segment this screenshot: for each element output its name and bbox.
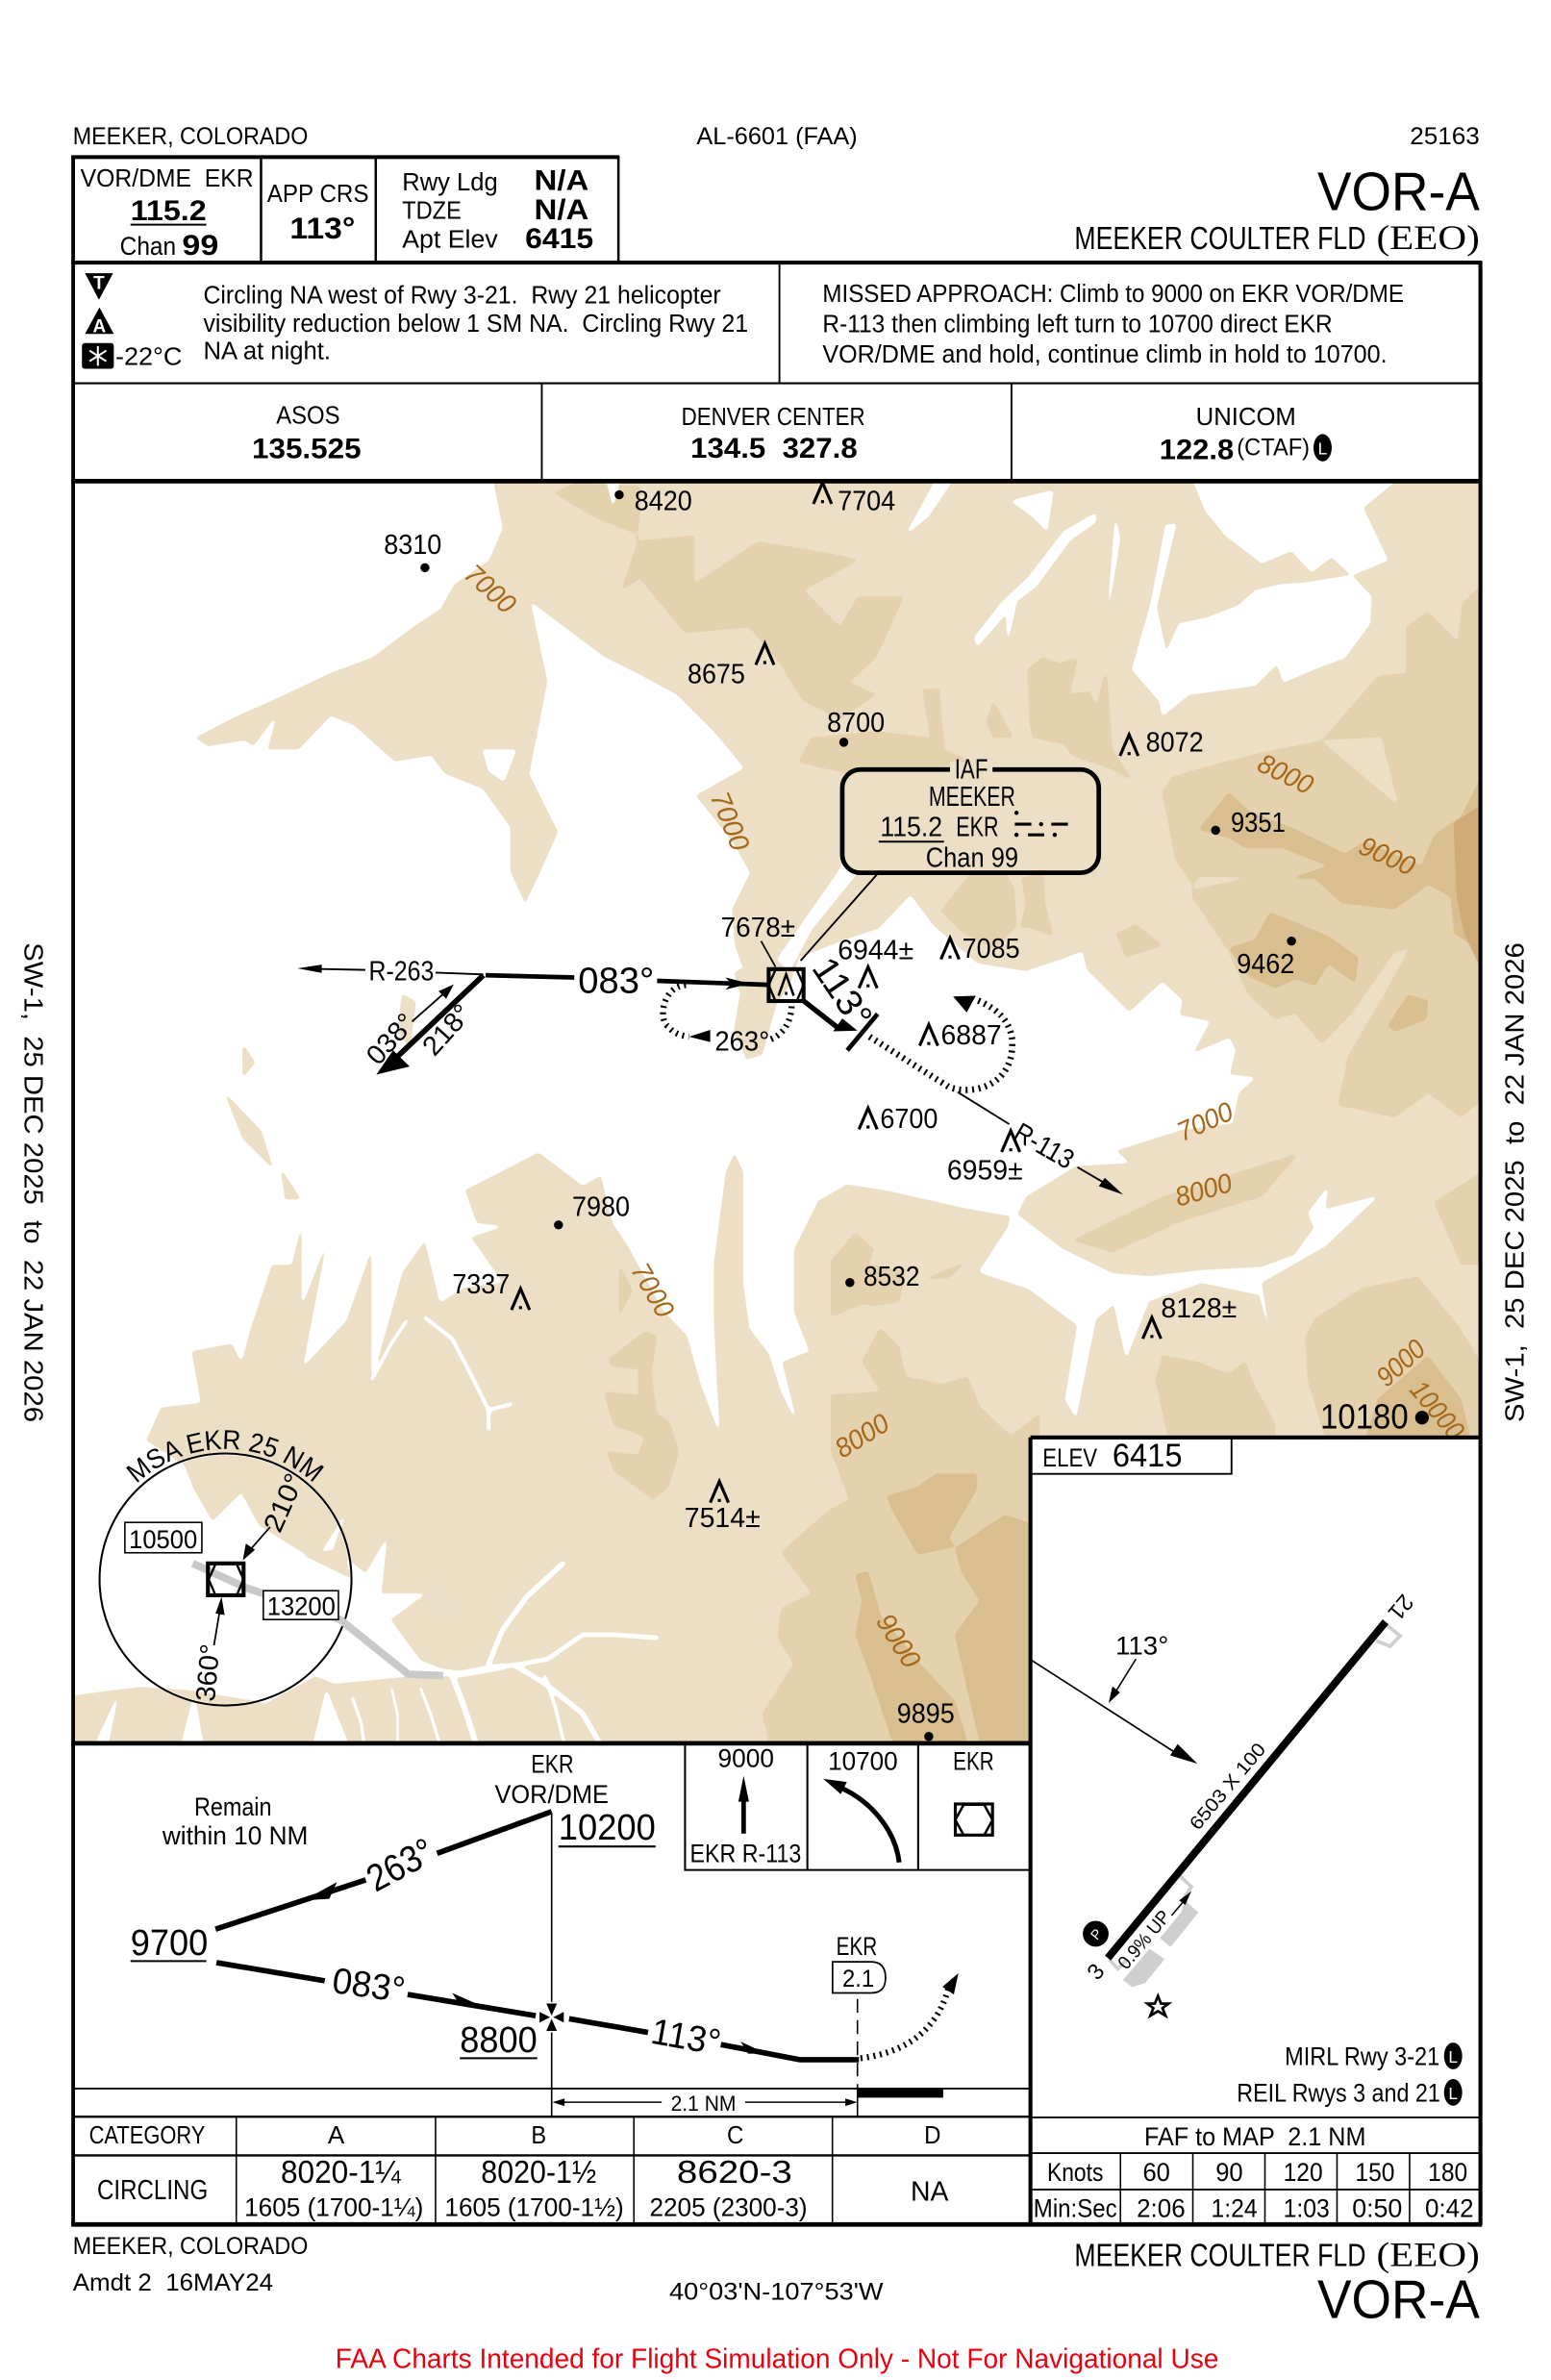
contour labels bbox=[458, 559, 1470, 1674]
plan view approach track bbox=[297, 941, 1123, 1194]
chart frame bbox=[71, 157, 1482, 2225]
icons: notes symbols: -22°C bbox=[115, 342, 182, 371]
time speed table: 1:03 bbox=[1284, 2193, 1330, 2222]
procedure title bbox=[1074, 163, 1480, 257]
elevation tag: ELEV bbox=[1042, 1443, 1097, 1472]
VOR symbol bbox=[768, 969, 804, 1001]
landing altitudes box: N/A bbox=[535, 194, 588, 226]
spot elevations and obstacles: 6887 bbox=[941, 1020, 1002, 1051]
icon: pilot controlled lighting bbox=[1083, 1921, 1109, 1946]
time speed table: 60 bbox=[1142, 2158, 1170, 2187]
missed approach text: R-113 then climbing left turn to 10700 direct EKR bbox=[822, 310, 1333, 338]
frequencies: 122.8 bbox=[1160, 434, 1234, 465]
runway bbox=[1108, 1622, 1386, 1958]
missed approach text: VOR/DME and hold, continue climb in hold to 10700. bbox=[822, 339, 1388, 368]
runway labels bbox=[1083, 1590, 1417, 1985]
callout: IAF Meeker VOR: 115.2 bbox=[880, 813, 942, 843]
time speed table: 0:50 bbox=[1352, 2193, 1402, 2222]
time speed table: Min:Sec bbox=[1034, 2193, 1117, 2222]
airport sketch panel bbox=[1031, 1438, 1481, 2223]
approach course arrow bbox=[1032, 1632, 1197, 1764]
spot elevations and obstacles: 8675 bbox=[688, 659, 745, 689]
callout: IAF Meeker VOR: MEEKER bbox=[929, 782, 1015, 813]
bottom margin: location and amendment: Amdt 2 16MAY24 bbox=[73, 2269, 273, 2296]
landing altitudes box: Apt Elev bbox=[402, 224, 498, 253]
MSA circle: 360° bbox=[190, 1642, 226, 1703]
frequencies: L bbox=[1318, 439, 1328, 459]
spot elevations and obstacles: 7704 bbox=[838, 486, 895, 516]
minimums table bbox=[73, 2117, 1031, 2223]
procedure title: VOR-A bbox=[1317, 163, 1480, 223]
MSA circle: 210° bbox=[258, 1469, 311, 1537]
missed approach holding pattern bbox=[869, 995, 1013, 1090]
MSA circle: MSA EKR 25 NM bbox=[126, 1430, 324, 1483]
FAF cross bbox=[538, 2002, 566, 2033]
top margin header: MEEKER, COLORADO bbox=[73, 123, 308, 150]
spot elevations and obstacles: 6959± bbox=[947, 1155, 1023, 1186]
landing altitudes box: Rwy Ldg bbox=[402, 167, 498, 196]
minimums table: A bbox=[328, 2120, 345, 2149]
MSA circle: 13200 bbox=[267, 1591, 336, 1620]
time speed table: 120 bbox=[1284, 2158, 1323, 2187]
minimums table: CATEGORY bbox=[89, 2120, 205, 2149]
contour labels: 9000 bbox=[1354, 831, 1419, 883]
aprons bbox=[1110, 1624, 1400, 1986]
spot elevations and obstacles: 8128± bbox=[1161, 1293, 1237, 1324]
minimums table: 2205 (2300-3) bbox=[650, 2193, 808, 2222]
time speed table: 150 bbox=[1355, 2158, 1394, 2187]
MAP bar bbox=[847, 1014, 878, 1050]
notes text: visibility reduction below 1 SM NA. Circling Rwy 21 bbox=[203, 309, 748, 338]
time speed table: 90 bbox=[1215, 2158, 1243, 2187]
bottom margin: location and amendment: MEEKER, COLORADO bbox=[73, 2233, 308, 2260]
time speed table bbox=[1031, 2117, 1481, 2223]
top margin header bbox=[73, 123, 1480, 150]
right margin validity: SW-1, 25 DEC 2025 to 22 JAN 2026 bbox=[1500, 942, 1530, 1422]
radial R-263 bbox=[297, 957, 484, 988]
feeder arrows 218 and 038: 218° bbox=[416, 998, 478, 1062]
remain within note: within 10 NM bbox=[162, 1821, 308, 1850]
minimums table: CIRCLING bbox=[97, 2175, 208, 2206]
spot elevations and obstacles: 8420 bbox=[635, 486, 692, 516]
outbound 263 track: 263° bbox=[360, 1830, 441, 1900]
spot elevations and obstacles: 7085 bbox=[963, 934, 1020, 965]
feeder arrows 218 and 038: 038° bbox=[361, 1008, 422, 1071]
minimums table: B bbox=[531, 2120, 546, 2149]
outbound 263 track bbox=[215, 1812, 552, 1929]
minimums table: NA bbox=[911, 2177, 948, 2208]
distance 2.1 NM bbox=[552, 2092, 858, 2116]
contour labels: 7000 bbox=[704, 788, 755, 856]
terrain map bbox=[61, 470, 1485, 1753]
callout: IAF Meeker VOR: EKR bbox=[956, 813, 999, 843]
spot elevations and obstacles: 7337 bbox=[452, 1269, 510, 1300]
bottom margin: location and amendment bbox=[73, 2233, 308, 2296]
navaid info box: VOR/DME EKR bbox=[81, 163, 254, 192]
missed approach text bbox=[822, 279, 1404, 368]
bottom title bbox=[1074, 2236, 1480, 2330]
EKR label and vertical: EKR bbox=[531, 1750, 574, 1779]
frequencies: UNICOM bbox=[1196, 402, 1296, 431]
notes text: Circling NA west of Rwy 3-21. Rwy 21 helicopter bbox=[203, 281, 721, 310]
spot elevations and obstacles bbox=[384, 483, 1429, 1741]
radial R-263: R-263 bbox=[369, 957, 434, 988]
frequencies: 134.5 327.8 bbox=[690, 433, 858, 464]
spot elevations and obstacles: 6944± bbox=[838, 936, 913, 966]
lighting notes: L bbox=[1448, 2084, 1458, 2103]
radial R-113 bbox=[958, 1092, 1123, 1194]
final track 113 bbox=[569, 2012, 859, 2064]
profile view bbox=[73, 1750, 1031, 2116]
notes text: NA at night. bbox=[203, 336, 331, 364]
transition track 083: 083° bbox=[578, 961, 654, 1001]
frequencies: ASOS bbox=[276, 400, 340, 429]
spot elevations and obstacles: 9462 bbox=[1237, 949, 1294, 980]
altitude 10200: 10200 bbox=[559, 1808, 656, 1848]
missed approach icons: 9000 bbox=[718, 1743, 774, 1772]
lighting notes: REIL Rwys 3 and 21 bbox=[1237, 2078, 1440, 2107]
time speed table: 0:42 bbox=[1425, 2193, 1474, 2222]
spot elevations and obstacles: 7980 bbox=[572, 1191, 630, 1222]
altitude 8800: 8800 bbox=[460, 2020, 538, 2061]
missed approach icons: 10700 bbox=[828, 1746, 898, 1775]
MSA circle: 10500 bbox=[129, 1525, 197, 1554]
inbound 083 track: 083° bbox=[330, 1961, 408, 2011]
spot elevations and obstacles: 8072 bbox=[1146, 727, 1204, 758]
landing altitudes box: 6415 bbox=[525, 223, 593, 255]
frequencies: DENVER CENTER bbox=[682, 402, 865, 431]
navaid info box: 115.2 bbox=[131, 195, 207, 227]
navaid info box: Chan bbox=[120, 232, 176, 261]
MAP fix EKR 2.1: 2.1 bbox=[842, 1966, 874, 1992]
spot elevations and obstacles: 7514± bbox=[685, 1503, 761, 1534]
missed approach icons: EKR bbox=[953, 1746, 994, 1775]
landing altitudes box: N/A bbox=[535, 164, 588, 196]
final track 113: 113° bbox=[648, 2012, 724, 2064]
contour labels: 10000 bbox=[1404, 1375, 1470, 1446]
runway labels: 6503 X 100 bbox=[1186, 1740, 1270, 1834]
approach course box: 113° bbox=[289, 211, 355, 245]
baseline and visibility bar bbox=[73, 2089, 1031, 2097]
procedure turn hold 263: 263° bbox=[714, 1026, 769, 1057]
missed approach icons: EKR R-113 bbox=[689, 1840, 801, 1868]
icon: pilot controlled lighting: P bbox=[1088, 1926, 1106, 1943]
contour labels: 9000 bbox=[1370, 1334, 1432, 1393]
contour labels: 8000 bbox=[1253, 748, 1318, 801]
spot elevations and obstacles: 9351 bbox=[1231, 808, 1286, 839]
EKR label and vertical: VOR/DME bbox=[495, 1780, 609, 1809]
icon: beacon star bbox=[1147, 1996, 1168, 2016]
callout: IAF Meeker VOR bbox=[801, 755, 1099, 961]
minimums table: D bbox=[924, 2120, 941, 2149]
spot elevations and obstacles: 8310 bbox=[384, 530, 441, 561]
lighting notes bbox=[1237, 2042, 1463, 2107]
transition track 083 bbox=[486, 961, 768, 1001]
leaders bbox=[762, 941, 775, 966]
inbound 083 track bbox=[216, 1961, 536, 2016]
missed approach icons bbox=[685, 1742, 1031, 1870]
frequencies bbox=[252, 400, 1332, 465]
spot elevations and obstacles: 7678± bbox=[721, 913, 795, 943]
contour labels: 7000 bbox=[1172, 1096, 1238, 1148]
MAP fix EKR 2.1 bbox=[833, 1932, 886, 2116]
radial R-113: R-113 bbox=[1009, 1117, 1079, 1176]
MAP fix EKR 2.1: EKR bbox=[837, 1932, 877, 1961]
notes text bbox=[203, 281, 748, 364]
frequencies: (CTAF) bbox=[1237, 435, 1310, 462]
time speed table: 180 bbox=[1428, 2158, 1467, 2187]
callout: IAF Meeker VOR: IAF bbox=[955, 755, 988, 786]
minimums table: 8620-3 bbox=[677, 2155, 792, 2191]
spot elevations and obstacles: 8700 bbox=[827, 708, 885, 739]
runway labels: 21 bbox=[1383, 1590, 1417, 1624]
distance 2.1 NM: 2.1 NM bbox=[671, 2092, 736, 2116]
bottom title: (EEO) bbox=[1376, 2236, 1480, 2274]
MSA circle bbox=[98, 1430, 443, 1707]
icons: notes symbols: A bbox=[93, 317, 107, 338]
approach course box bbox=[267, 179, 369, 245]
minimums table: 1605 (1700-1½) bbox=[444, 2193, 624, 2222]
navaid info box bbox=[81, 163, 254, 262]
landing altitudes box bbox=[402, 164, 593, 255]
approach course arrow: 113° bbox=[1115, 1632, 1168, 1661]
spot elevations and obstacles: 9895 bbox=[897, 1699, 955, 1730]
runway labels: 0.9% UP bbox=[1114, 1907, 1175, 1973]
bottom title: MEEKER COULTER FLD bbox=[1074, 2239, 1365, 2274]
approach course box: APP CRS bbox=[267, 179, 369, 208]
minimums table: C bbox=[727, 2120, 743, 2149]
minimums table: 1605 (1700-1¼) bbox=[244, 2193, 423, 2222]
contour labels: 7000 bbox=[458, 559, 522, 620]
final approach 113: 113° bbox=[804, 950, 880, 1036]
bottom title: VOR-A bbox=[1317, 2269, 1480, 2330]
white lower panels bbox=[73, 1438, 1483, 2225]
minimums table: 8020-1¼ bbox=[281, 2155, 401, 2191]
landing altitudes box: TDZE bbox=[402, 195, 462, 224]
contour labels: 8000 bbox=[1171, 1167, 1236, 1214]
remain within note: Remain bbox=[194, 1792, 272, 1821]
minimums table: 8020-1½ bbox=[481, 2155, 596, 2191]
icons: notes symbols: T bbox=[93, 274, 105, 294]
lighting notes: L bbox=[1448, 2047, 1458, 2067]
procedure turn hold 263 bbox=[663, 985, 791, 1057]
runway labels: 3 bbox=[1083, 1960, 1110, 1985]
time speed table: 1:24 bbox=[1211, 2193, 1258, 2222]
time speed table: Knots bbox=[1047, 2158, 1103, 2187]
disclaimer: FAA Charts Intended for Flight Simulation Only - Not For Navigational Use bbox=[336, 2343, 1218, 2374]
frequencies: 135.525 bbox=[252, 434, 362, 465]
callout: IAF Meeker VOR: Chan 99 bbox=[926, 842, 1018, 873]
icons: notes symbols bbox=[82, 273, 182, 371]
bottom coordinates: 40°03'N-107°53'W bbox=[669, 2278, 884, 2305]
spot elevations and obstacles: 6700 bbox=[880, 1104, 938, 1135]
contour labels: 7000 bbox=[624, 1258, 680, 1323]
navaid info box: 99 bbox=[182, 230, 218, 262]
contour labels: 9000 bbox=[869, 1609, 926, 1674]
EKR label and vertical bbox=[495, 1750, 609, 2116]
missed approach text: MISSED APPROACH: Climb to 9000 on EKR VOR/DME bbox=[822, 279, 1404, 308]
elevation tag bbox=[1031, 1438, 1232, 1474]
left margin validity: SW-1, 25 DEC 2025 to 22 JAN 2026 bbox=[18, 942, 48, 1422]
top margin header: 25163 bbox=[1410, 123, 1480, 150]
time speed table: FAF to MAP 2.1 NM bbox=[1144, 2122, 1365, 2151]
time speed table: 2:06 bbox=[1137, 2193, 1186, 2222]
missed approach climb bbox=[861, 1973, 959, 2058]
lighting notes: MIRL Rwy 3-21 bbox=[1285, 2042, 1439, 2070]
spot elevations and obstacles: 8532 bbox=[863, 1262, 919, 1292]
top margin header: AL-6601 (FAA) bbox=[696, 123, 858, 150]
elevation tag: 6415 bbox=[1113, 1438, 1182, 1474]
procedure title: (EEO) bbox=[1376, 218, 1480, 257]
procedure title: MEEKER COULTER FLD bbox=[1074, 221, 1365, 257]
contour labels: 8000 bbox=[830, 1408, 895, 1465]
altitude 9700: 9700 bbox=[131, 1923, 208, 1964]
feeder arrows 218 and 038 bbox=[361, 975, 484, 1075]
spot elevations and obstacles: 10180 bbox=[1320, 1396, 1409, 1436]
remain within note bbox=[162, 1792, 308, 1850]
